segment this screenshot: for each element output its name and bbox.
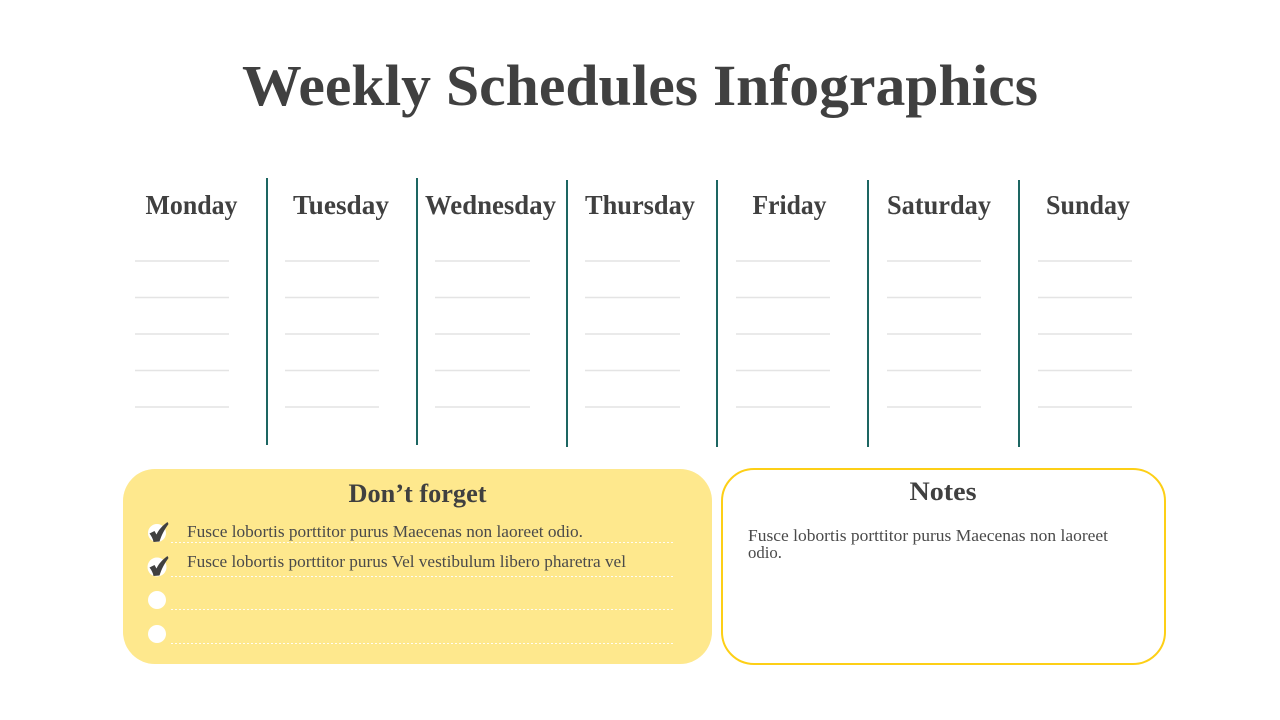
notes text: odio. xyxy=(748,543,782,562)
column: Friday: Friday xyxy=(752,190,827,220)
column: Sunday: Sunday xyxy=(1046,190,1130,220)
checklist item 2: Fusce lobortis porttitor purus Vel vestibulum libero pharetra vel xyxy=(187,552,626,571)
column: Tuesday: Tuesday xyxy=(293,190,389,220)
checklist item 3 xyxy=(148,591,673,610)
checklist item 1 xyxy=(148,522,673,542)
checklist item 4 xyxy=(148,625,673,644)
column: Thursday: Thursday xyxy=(585,190,695,220)
panel: notes xyxy=(722,469,1165,664)
heading: notes: Notes xyxy=(910,477,976,506)
heading: don't forget: Don’t forget xyxy=(348,479,487,508)
weekly schedule table xyxy=(135,178,1132,447)
column: Monday: Monday xyxy=(146,190,238,220)
title: Weekly Schedules Infographics xyxy=(242,53,1038,118)
notes text xyxy=(748,526,1108,562)
notes text: Fusce lobortis porttitor purus Maecenas non laoreet xyxy=(748,526,1108,545)
column: Saturday: Saturday xyxy=(887,190,991,220)
checklist item 2 xyxy=(148,552,673,576)
column: Wednesday: Wednesday xyxy=(425,190,556,220)
panel: don't forget xyxy=(123,469,712,664)
checklist item 1: Fusce lobortis porttitor purus Maecenas non laoreet odio. xyxy=(187,522,583,541)
